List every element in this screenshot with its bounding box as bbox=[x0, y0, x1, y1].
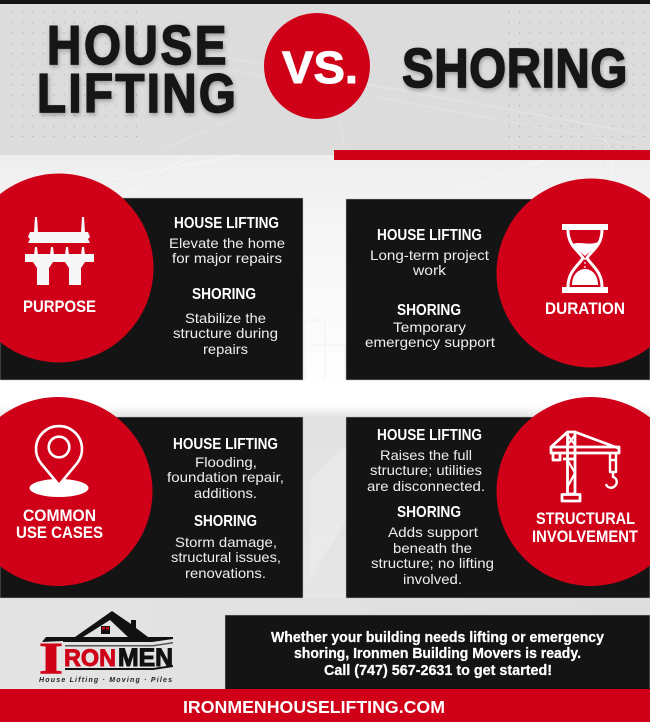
text: duration comparison: SHORING bbox=[397, 302, 461, 319]
text: use cases comparison: SHORING bbox=[194, 513, 257, 530]
text: purpose comparison: Stabilize the bbox=[185, 310, 266, 326]
text: purpose comparison: repairs bbox=[203, 341, 248, 357]
text: use cases comparison: Storm damage, bbox=[175, 534, 277, 550]
icon: map pin bbox=[30, 426, 88, 497]
label: common use cases: COMMON bbox=[23, 506, 96, 525]
text: purpose comparison bbox=[169, 215, 285, 357]
panel: structural involvement bbox=[346, 397, 650, 598]
text: structural comparison: involved. bbox=[403, 571, 462, 587]
text: duration comparison bbox=[365, 227, 495, 350]
top black bar bbox=[0, 0, 650, 4]
icon: roof bbox=[42, 611, 173, 670]
text: duration comparison: work bbox=[412, 262, 447, 278]
text: structural comparison: Adds support bbox=[388, 524, 478, 540]
text: use cases comparison: foundation repair, bbox=[167, 469, 284, 485]
text: structural comparison bbox=[367, 427, 494, 587]
title: house lifting bbox=[37, 14, 236, 124]
text: duration comparison: Temporary bbox=[393, 319, 466, 335]
call to action panel bbox=[225, 615, 650, 690]
text: duration comparison: emergency support bbox=[365, 334, 495, 350]
text: purpose comparison: structure during bbox=[173, 325, 278, 341]
text: duration comparison: HOUSE LIFTING bbox=[377, 227, 482, 244]
call to action panel: shoring, Ironmen Building Movers is ready. bbox=[294, 646, 581, 662]
text: use cases comparison: HOUSE LIFTING bbox=[173, 436, 278, 453]
text: purpose comparison: Elevate the home bbox=[169, 235, 285, 251]
logo text ron: RON bbox=[64, 645, 116, 672]
label: structural involvement: INVOLVEMENT bbox=[532, 527, 639, 546]
text: structural comparison: HOUSE LIFTING bbox=[377, 427, 482, 444]
label: purpose: PURPOSE bbox=[23, 297, 96, 316]
label: common use cases bbox=[16, 506, 103, 542]
label: structural involvement: STRUCTURAL bbox=[536, 509, 635, 528]
text: use cases comparison: renovations. bbox=[185, 565, 266, 581]
logo letter i: I bbox=[39, 634, 63, 683]
red accent bar bbox=[334, 150, 650, 160]
icon: bridge supports bbox=[25, 217, 94, 285]
logo tagline: House Lifting · Moving · Piles bbox=[39, 677, 172, 684]
vs badge: VS. bbox=[282, 42, 358, 93]
text: purpose comparison: SHORING bbox=[192, 286, 256, 303]
text: structural comparison: beneath the bbox=[393, 540, 472, 556]
title: house lifting: HOUSE bbox=[47, 14, 227, 76]
text: purpose comparison: for major repairs bbox=[172, 250, 282, 266]
vs badge bbox=[264, 13, 370, 119]
text: structural comparison: are disconnected. bbox=[367, 478, 485, 494]
text: structural comparison: structure; utilities bbox=[370, 462, 482, 478]
icon: hourglass bbox=[562, 224, 608, 293]
call to action panel: Call (747) 567-2631 to get started! bbox=[324, 663, 552, 679]
text: use cases comparison: additions. bbox=[194, 485, 257, 501]
label: duration: DURATION bbox=[545, 299, 625, 318]
title: shoring: SHORING bbox=[402, 37, 627, 99]
panel: duration bbox=[346, 178, 650, 380]
logo: ironmen bbox=[39, 611, 173, 684]
panel: common use cases bbox=[0, 397, 303, 598]
text: structural comparison: SHORING bbox=[397, 504, 461, 521]
logo text men: MEN bbox=[118, 644, 173, 672]
icon: crane bbox=[551, 432, 619, 501]
label: common use cases: USE CASES bbox=[16, 523, 103, 542]
text: duration comparison: Long-term project bbox=[370, 247, 489, 263]
text: structural comparison: Raises the full bbox=[380, 447, 472, 463]
label: structural involvement bbox=[532, 509, 639, 546]
footer banner bbox=[0, 689, 650, 722]
text: purpose comparison: HOUSE LIFTING bbox=[174, 215, 279, 232]
footer banner: IRONMENHOUSELIFTING.COM bbox=[183, 697, 445, 717]
text: use cases comparison: Flooding, bbox=[195, 454, 257, 470]
text: use cases comparison: structural issues, bbox=[171, 549, 281, 565]
text: use cases comparison bbox=[167, 436, 284, 581]
text: structural comparison: structure; no lifting bbox=[371, 555, 494, 571]
panel: purpose bbox=[0, 174, 303, 380]
call to action panel: Whether your building needs lifting or emergency bbox=[271, 630, 604, 646]
title: house lifting: LIFTING bbox=[37, 62, 236, 124]
